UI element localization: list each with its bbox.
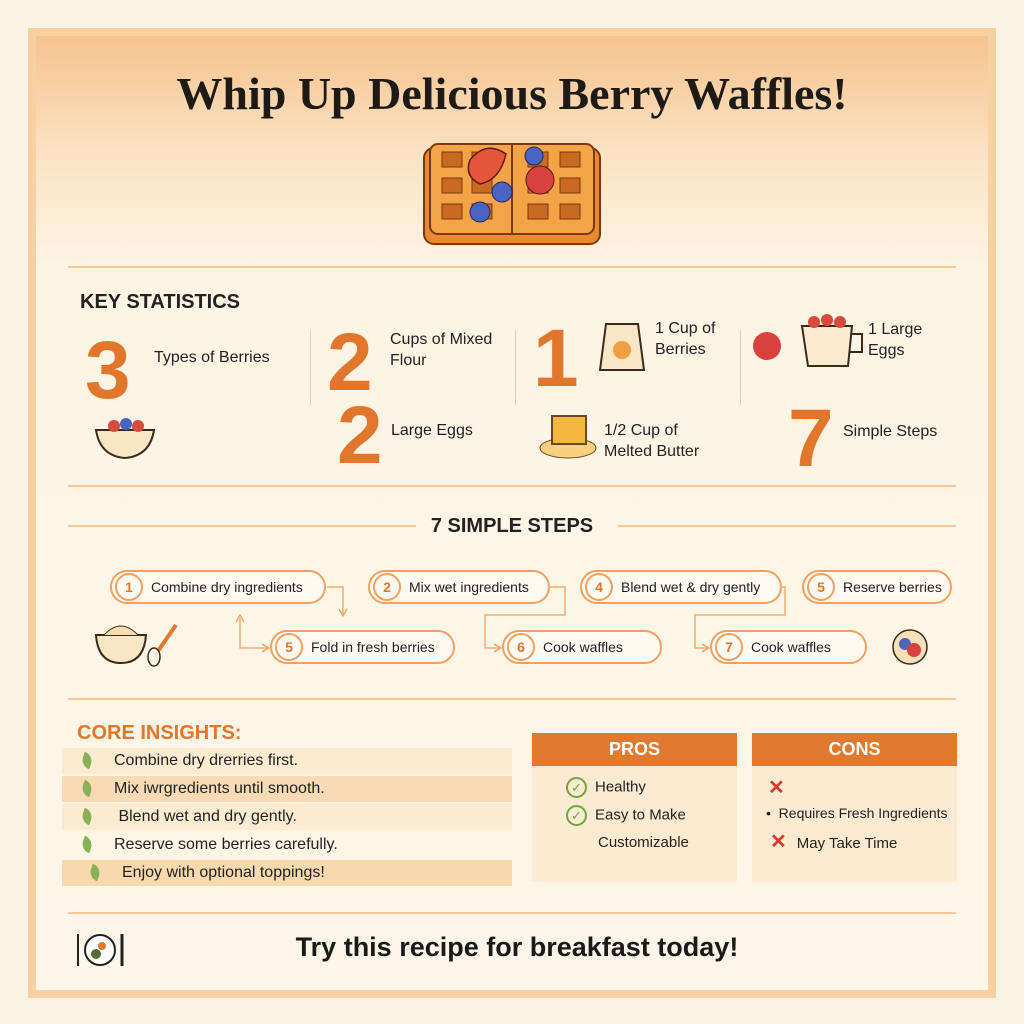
key statistics: 2 [327, 317, 373, 408]
steps flow: 4 [595, 579, 603, 595]
steps connectors [236, 586, 786, 653]
icon: waffle [423, 143, 601, 245]
core insights: CORE INSIGHTS: [77, 722, 241, 744]
icon: plate and cutlery [77, 934, 124, 966]
steps flow: Blend wet & dry gently [621, 579, 760, 595]
key statistics: Types of Berries [154, 349, 270, 366]
pros: ✓ [571, 808, 582, 823]
key statistics: Simple Steps [843, 423, 937, 440]
cons: ✕ [768, 777, 785, 799]
core insights: Blend wet and dry gently. [118, 808, 297, 825]
icon: bowl [94, 418, 156, 459]
core insights: Mix iwrgredients until smooth. [114, 780, 325, 797]
steps flow: 5 [817, 579, 825, 595]
title: Whip Up Delicious Berry Waffles! [176, 68, 848, 119]
pros [532, 733, 737, 882]
key statistics: Eggs [868, 342, 904, 359]
core insights: Enjoy with optional toppings! [122, 864, 325, 881]
key statistics: 7 [788, 393, 834, 484]
core insights: Reserve some berries carefully. [114, 836, 338, 853]
key statistics: 1 Large [868, 321, 922, 338]
key statistics: 2 [337, 390, 383, 481]
key statistics: Berries [655, 341, 706, 358]
pros: Easy to Make [595, 806, 686, 823]
key statistics [80, 291, 937, 484]
steps flow: 2 [383, 579, 391, 595]
cons [752, 733, 957, 882]
icon: butter [540, 415, 596, 458]
icon: flour bag [598, 323, 646, 371]
pros: ✓ [571, 780, 582, 795]
cons: • Requires Fresh Ingredients [766, 805, 948, 821]
steps flow: Combine dry ingredients [151, 579, 303, 595]
key statistics: 1 Cup of [655, 320, 715, 337]
key statistics: Large Eggs [391, 422, 473, 439]
steps flow: 7 [725, 639, 733, 655]
steps flow: Cook waffles [751, 639, 831, 655]
key statistics: 1/2 Cup of [604, 422, 678, 439]
steps flow: 5 [285, 639, 293, 655]
cons: CONS [828, 739, 880, 759]
key statistics: Flour [390, 352, 426, 369]
icon: bowl and whisk [94, 624, 178, 667]
footer call to action: Try this recipe for breakfast today! [296, 932, 738, 962]
key statistics: 3 [85, 325, 131, 416]
key statistics: 1 [533, 313, 579, 404]
icon: berries plate [892, 629, 928, 665]
core insights [62, 722, 512, 886]
pros: Customizable [598, 834, 689, 851]
steps flow: Mix wet ingredients [409, 579, 529, 595]
pros: PROS [609, 739, 660, 759]
steps flow: Cook waffles [543, 639, 623, 655]
steps flow: 1 [125, 579, 133, 595]
steps flow: 6 [517, 639, 525, 655]
key statistics: Cups of Mixed [390, 331, 492, 348]
steps heading: 7 SIMPLE STEPS [431, 515, 593, 537]
heading: KEY STATISTICS [80, 291, 240, 313]
key statistics: Melted Butter [604, 443, 699, 460]
steps flow [94, 570, 952, 667]
steps flow: Reserve berries [843, 579, 942, 595]
steps flow: Fold in fresh berries [311, 639, 435, 655]
core insights: Combine dry drerries first. [114, 752, 298, 769]
pros: Healthy [595, 778, 646, 795]
cons: ✕ May Take Time [770, 831, 897, 853]
icon: raspberry & cup [753, 314, 863, 367]
